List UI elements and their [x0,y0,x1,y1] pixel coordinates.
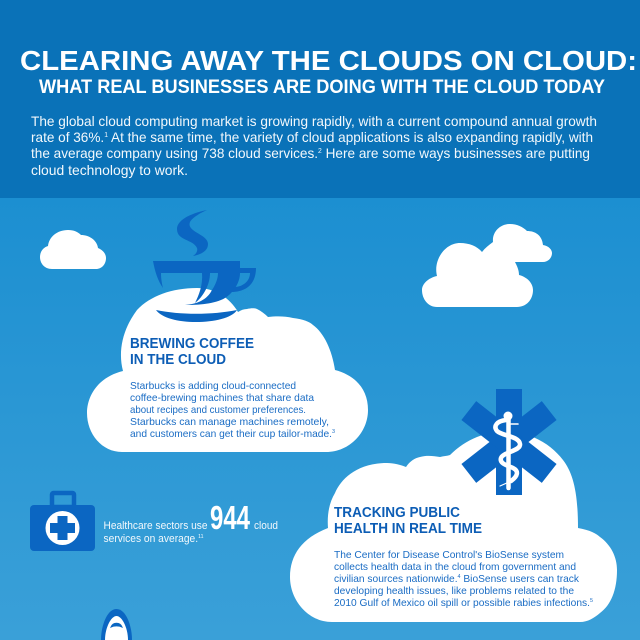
intro text: 1 [104,132,108,139]
body text: 2010 Gulf of Mexico oil spill or possible rabies infections. [334,598,594,609]
intro text: cloud technology to work. [31,162,188,178]
healthcare stat: Healthcare sectors use [104,520,208,532]
healthcare stat: cloud [254,520,278,532]
heading: BREWING COFFEE [130,336,254,352]
heading: TRACKING PUBLIC [334,505,460,521]
intro text: the average company using 738 cloud services. [31,145,327,161]
intro text [31,113,597,178]
body text: collects health data in the cloud from government and [334,562,576,573]
body text: BioSense users can track [461,574,580,585]
body text: 4 [458,574,461,580]
panel: brewing coffee cloud [87,210,368,452]
heading [334,505,482,537]
icon: coffee cup [153,210,256,322]
icon: star of life [461,389,557,495]
intro text: At the same time, the variety of cloud applications is also expanding rapidly, with [108,129,593,145]
body text: The Center for Disease Control's BioSense system [334,550,564,561]
healthcare stat [104,499,278,545]
subtitle: WHAT REAL BUSINESSES ARE DOING WITH THE CLOUD TODAY [39,77,605,98]
cup body [185,273,240,305]
body text: developing health issues, like problems related to the [334,586,574,597]
body text: civilian sources nationwide. [334,574,460,585]
body text: Starbucks is adding cloud-connected [130,381,296,392]
saucer [156,310,237,322]
rod and snake [495,418,520,488]
cup strand [195,273,210,303]
small cloud left [40,230,106,269]
intro text: The global cloud computing market is growing rapidly, with a current compound annual growth [31,113,597,129]
icon: rocket [101,609,132,640]
icon: first aid kit [30,493,95,551]
intro text: rate of 36%. [31,129,106,145]
header panel [0,0,640,198]
title: CLEARING AWAY THE CLOUDS ON CLOUD: [20,45,637,76]
body text: 5 [590,598,593,604]
body text: about recipes and customer preferences. [130,405,306,416]
panel: public health cloud [290,389,617,622]
stat number: 944 [210,499,250,536]
heading [130,336,254,368]
steam [177,210,208,256]
body text: and customers can get their cup tailor-made. [130,429,336,440]
healthcare stat: 11 [198,534,204,540]
cup handle [231,268,256,292]
heading: IN THE CLOUD [130,352,226,368]
body text: 3 [332,429,335,435]
intro text: Here are some ways businesses are putting [322,145,590,161]
double cloud right [422,224,552,307]
healthcare stat: services on average. [104,533,203,545]
cup bar [153,261,240,288]
body text: Starbucks can manage machines remotely, [130,417,329,428]
intro text: 2 [318,148,322,155]
body text [130,381,335,440]
body text: coffee-brewing machines that share data [130,393,314,404]
body text [334,550,593,609]
heading: HEALTH IN REAL TIME [334,521,482,537]
